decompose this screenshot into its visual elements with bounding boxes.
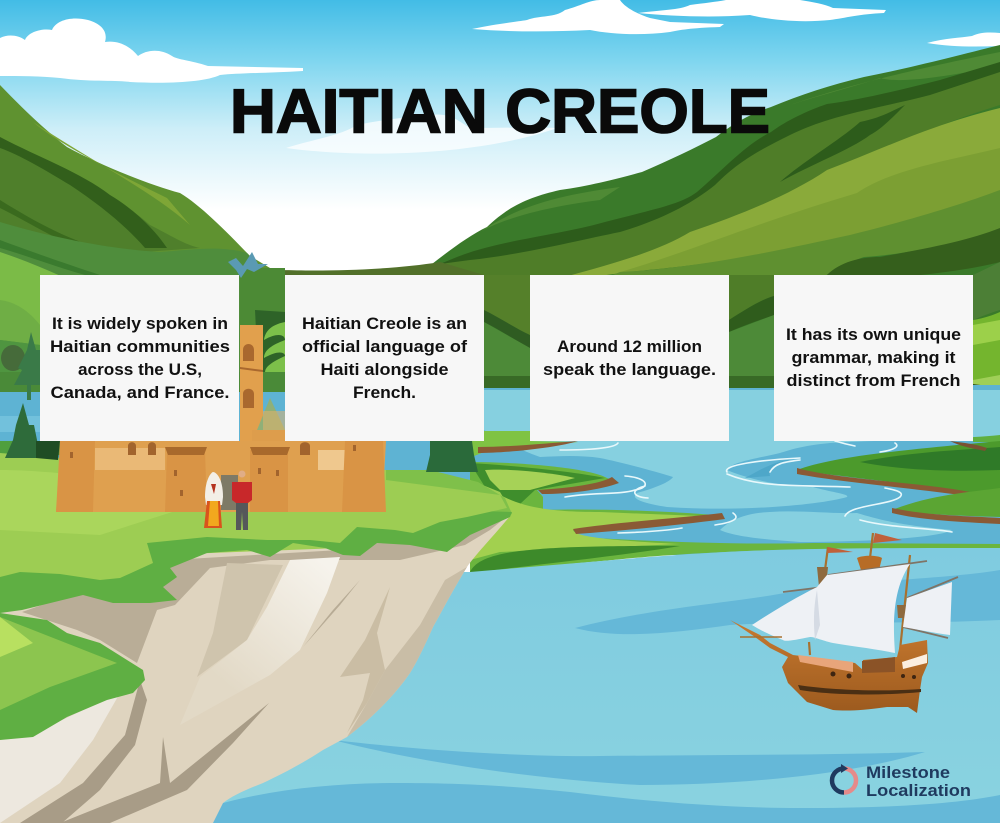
river	[0, 372, 1000, 555]
castle	[56, 325, 386, 512]
card: official language: Haiti alongside	[320, 361, 448, 379]
logo: Milestone Localization	[832, 764, 971, 800]
card: communities: across the U.S,	[78, 361, 202, 379]
sea	[190, 548, 1000, 823]
card: grammar: grammar, making it	[792, 349, 956, 367]
castle grounds and grassy cliff	[0, 441, 512, 823]
title: HAITIAN CREOLE	[230, 78, 770, 146]
card: speakers	[530, 275, 729, 441]
card: official language	[285, 275, 484, 441]
logo: Milestone Localization: Milestone	[866, 764, 950, 782]
card: communities: Haitian communities	[50, 338, 230, 356]
river highlights	[560, 441, 952, 533]
card: speakers: speak the language.	[543, 361, 716, 379]
card: official language: French.	[353, 384, 416, 402]
clouds	[0, 0, 1000, 154]
card: speakers: Around 12 million	[557, 338, 702, 356]
sailing ship	[730, 533, 958, 713]
people: couple in traditional dress	[204, 470, 252, 530]
card: communities	[40, 275, 239, 441]
icon: blue bird atop castle spire	[228, 252, 268, 278]
left hills	[0, 85, 290, 415]
ship sails	[752, 564, 910, 653]
sky	[0, 0, 1000, 290]
hill behind castle	[240, 268, 285, 440]
ship masts and flags	[783, 533, 958, 655]
card: communities: It is widely spoken in	[52, 315, 228, 333]
card: communities: Canada, and France.	[50, 384, 230, 402]
logo: Milestone Localization: Localization	[866, 782, 971, 800]
right hills	[250, 45, 1000, 420]
pine trees	[5, 332, 478, 472]
card: official language: official language of	[302, 338, 468, 356]
river banks	[440, 431, 1000, 572]
ship hull	[730, 620, 928, 713]
card: grammar: distinct from French	[786, 372, 960, 390]
card: official language: Haitian Creole is an	[302, 315, 467, 333]
card: grammar: It has its own unique	[786, 326, 961, 344]
card: grammar	[774, 275, 973, 441]
